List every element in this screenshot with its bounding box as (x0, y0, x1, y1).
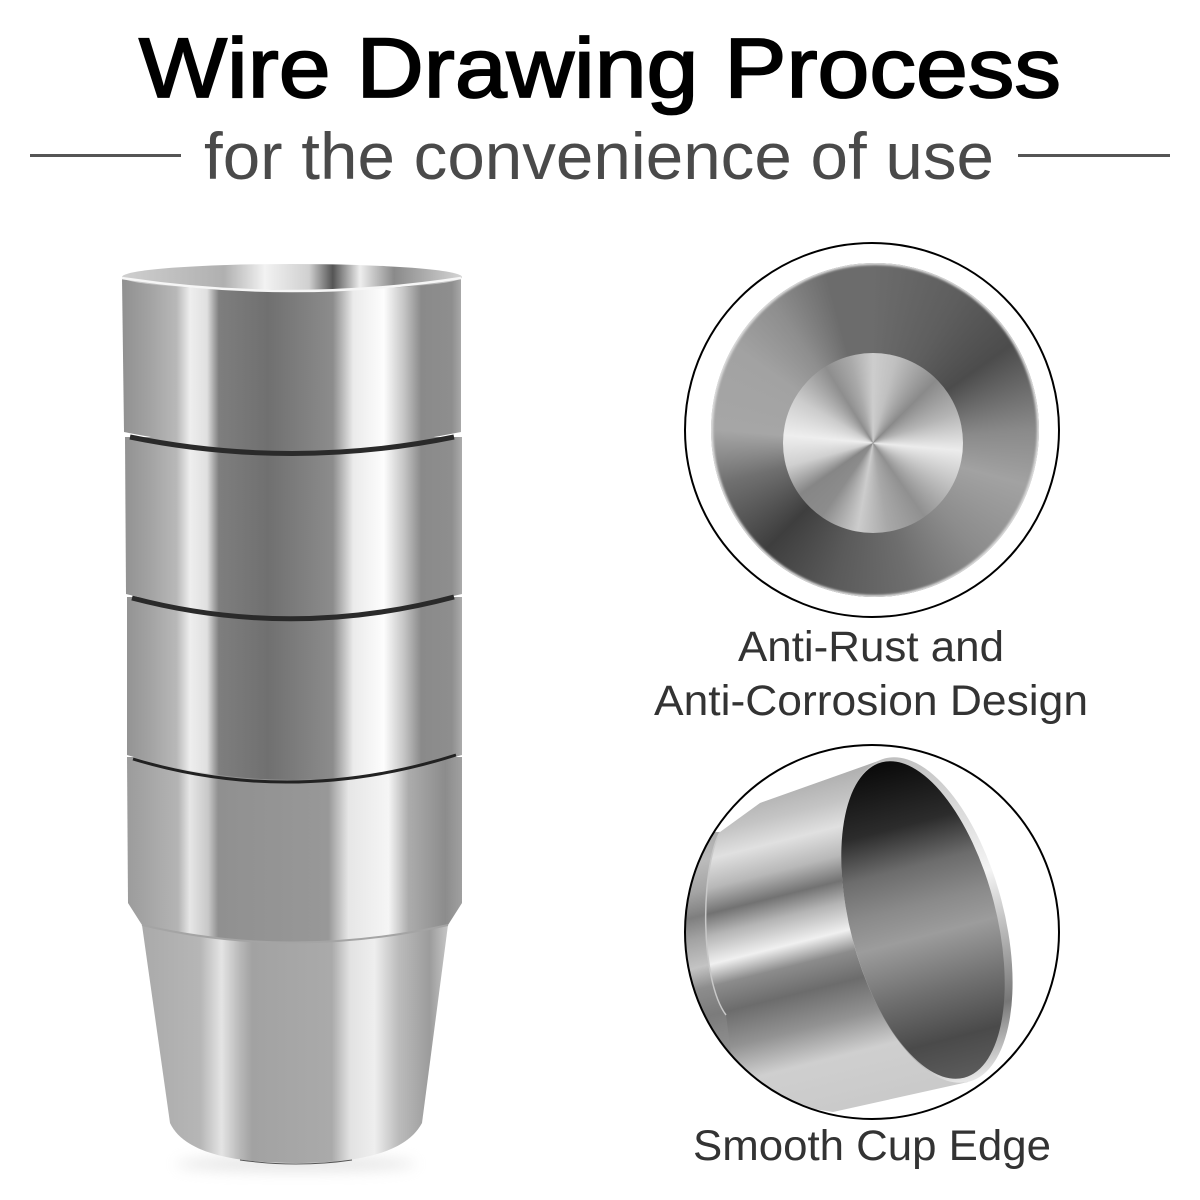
stack of four steel cups (122, 264, 462, 1171)
label: smooth cup edge: Smooth Cup Edge (693, 1122, 1051, 1170)
cup outer body (670, 760, 968, 1112)
third cup (127, 597, 462, 782)
subtitle with side rules (30, 119, 1170, 193)
title: Wire Drawing Process (139, 21, 1061, 115)
label: anti-rust: Anti-Corrosion Design (654, 677, 1088, 725)
cup shadow (176, 1157, 416, 1171)
label: anti-rust (654, 623, 1088, 725)
circle: cup interior detail (685, 243, 1059, 617)
circle: smooth cup edge detail (670, 739, 1059, 1119)
cup base disc (783, 353, 963, 533)
cup interior wall (711, 263, 1039, 597)
stepped band (686, 832, 727, 1029)
cup opening (842, 757, 1013, 1083)
second cup (125, 437, 462, 619)
label: anti-rust: Anti-Rust and (738, 623, 1004, 671)
subtitle with side rules: for the convenience of use (204, 119, 994, 193)
top cup (122, 264, 462, 454)
bottom cup (127, 757, 462, 1164)
